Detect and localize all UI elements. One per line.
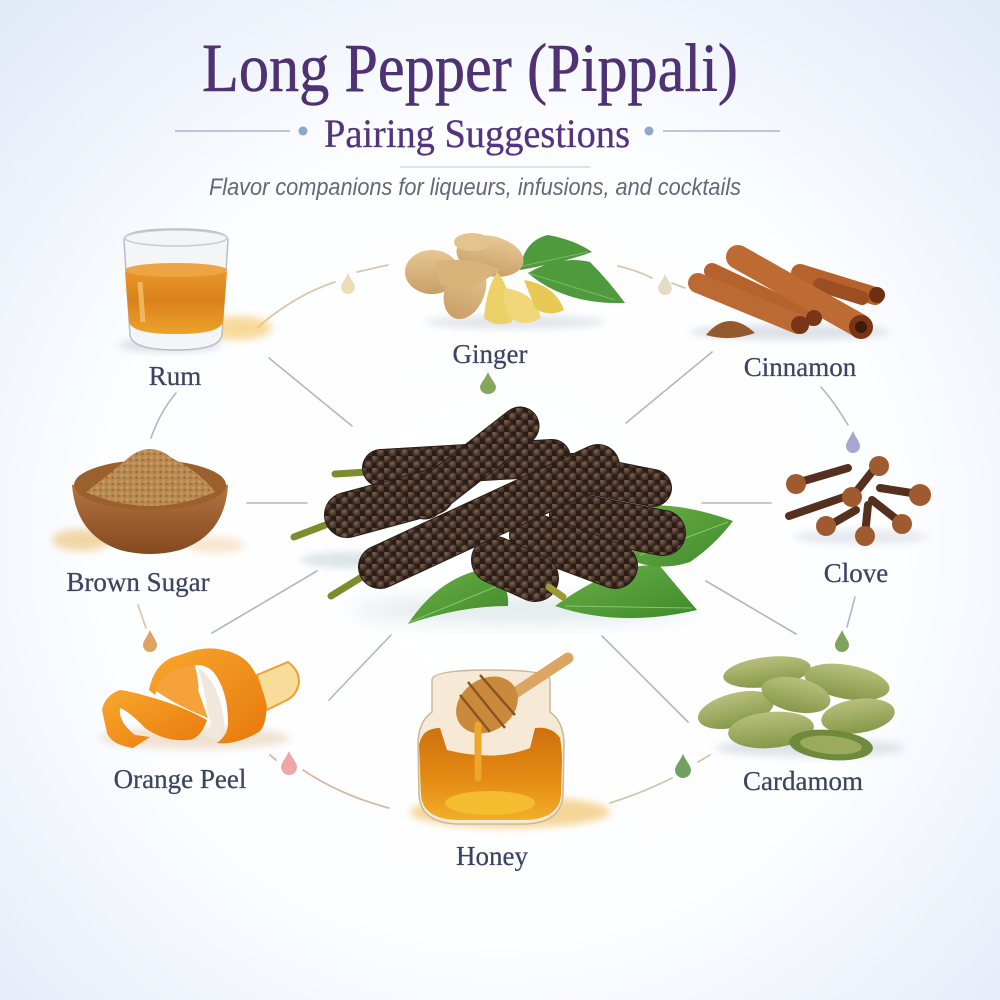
icon: ginger [405,229,625,329]
leaves [408,505,733,624]
label: ginger: Ginger [453,339,527,369]
icon: cinnamon [690,257,890,340]
title: Long Pepper (Pippali) [202,30,738,106]
icon: orange peel [100,648,299,749]
subtitle: pairing suggestions [175,111,780,167]
label: cinnamon: Cinnamon [744,352,857,382]
subtitle: pairing suggestions: Pairing Suggestions [324,111,630,156]
label: clove: Clove [824,558,888,588]
label: rum: Rum [149,361,201,391]
ring connectors with drops [138,265,860,808]
connector lines to center [212,352,796,722]
icon: brown sugar bowl [52,449,245,554]
label: orange peel: Orange Peel [114,764,246,794]
stems [294,472,368,596]
spikes [347,426,663,578]
center: long pepper cluster [294,426,733,624]
label: cardamom: Cardamom [743,766,863,796]
label: honey: Honey [456,841,528,871]
icon: clove [786,456,931,546]
icon: cardamom [694,652,905,764]
label: brown sugar: Brown Sugar [66,567,210,597]
icon: rum glass [118,229,272,352]
icon: honey jar [410,658,610,828]
tagline: Flavor companions for liqueurs, infusions, and cocktails [209,174,741,201]
